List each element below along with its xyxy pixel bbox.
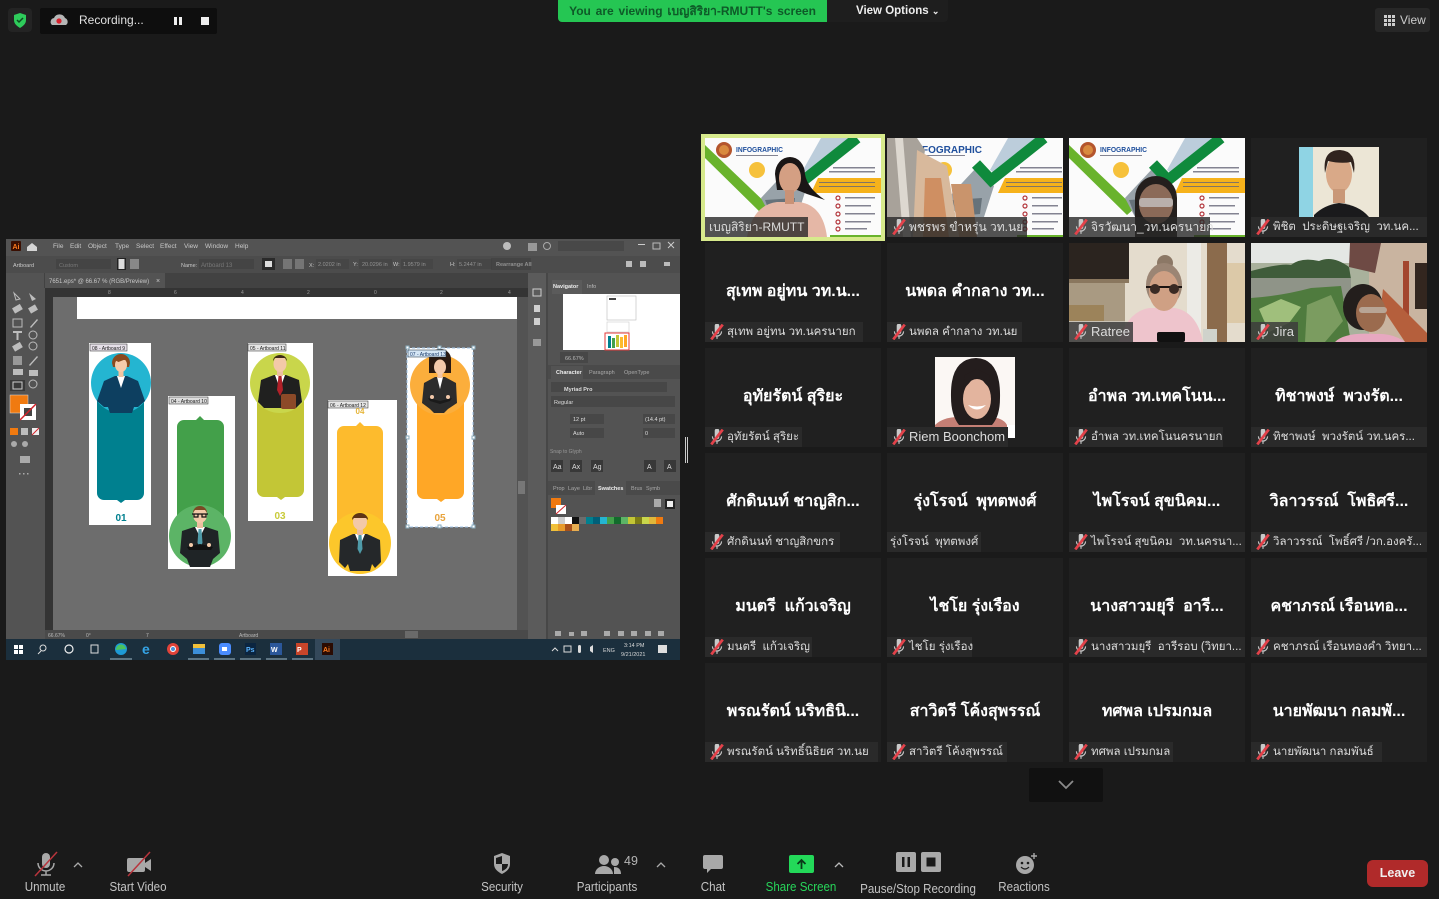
large name: นพดล คำกลาง วท... xyxy=(905,283,1045,300)
Illustrator window chrome: 2.0202 in xyxy=(318,262,341,268)
banner: viewing screen xyxy=(558,0,827,22)
canvas: 6 xyxy=(174,290,177,296)
tile: พรณรัตน์ xyxy=(705,663,881,762)
Windows taskbar: W xyxy=(271,647,278,654)
banner: viewing screen: You are viewing เบญสิริยา-RMUTT's screen xyxy=(569,4,816,18)
name tag xyxy=(1069,742,1173,762)
artboard 01: teal card: 01 xyxy=(115,513,127,524)
icon: share screen xyxy=(789,855,814,873)
tile: ไพโรจน์ xyxy=(1069,453,1245,552)
tile: พชรพร: INFOGRAPHIC xyxy=(912,145,982,156)
right dock panels: Laye xyxy=(568,486,580,492)
canvas xyxy=(45,290,528,639)
right dock panels: (14.4 pt) xyxy=(645,417,666,423)
view options dropdown: View Options ⌄ xyxy=(856,5,939,17)
artboard 05: orange card selected: 05 xyxy=(434,513,446,524)
tile: จิรวัฒนา: INFOGRAPHIC xyxy=(1100,145,1148,154)
tools panel xyxy=(6,273,44,639)
artboard 04: yellow card: 04 xyxy=(356,407,365,416)
artboard 01: teal card xyxy=(89,343,151,525)
large name: ไพโรจน์ สุขนิคม... xyxy=(1094,493,1220,510)
right dock panels: Symb xyxy=(646,486,660,492)
name tag: ทศพล เปรมกมล xyxy=(1091,746,1170,758)
large name: อุทัยรัตน์ สุริยะ xyxy=(743,388,843,405)
Illustrator window chrome: Help xyxy=(235,243,249,250)
tile: สาวิตรี xyxy=(887,663,1063,762)
Illustrator window chrome: File xyxy=(53,243,64,250)
canvas: 4 xyxy=(508,290,511,296)
large name: ศักดินนท์ ชาญสิก... xyxy=(726,493,860,510)
tile: presenter: INFOGRAPHIC xyxy=(736,145,784,154)
canvas: 2 xyxy=(307,290,310,296)
name tag: ศักดินนท์ ชาญสิกขกร xyxy=(727,536,834,548)
Illustrator window chrome: Select xyxy=(136,243,154,250)
participant count: 49 xyxy=(624,854,638,868)
artboard 02: green card xyxy=(168,396,235,569)
artboard 03: olive card: 03 xyxy=(274,511,286,522)
name tag: ไชโย รุ่งเรือง xyxy=(909,641,973,653)
right dock panels: Libr xyxy=(583,486,592,492)
name tag: พรณรัตน์ นริทธิ์นิธิยศ วท.นย xyxy=(727,746,869,758)
name tag xyxy=(1251,322,1298,342)
name tag xyxy=(887,217,1027,237)
tile: ศักดินนท์ xyxy=(705,453,881,552)
artboard 01: teal card: 08 - Artboard 9 xyxy=(92,346,125,352)
Illustrator window chrome: Artboard xyxy=(13,263,34,269)
tile: นพดล xyxy=(887,243,1063,342)
tile: จิรวัฒนา xyxy=(1069,138,1245,237)
tile: ไชโย xyxy=(887,558,1063,657)
split handle xyxy=(685,437,686,463)
tile: พชรพร xyxy=(887,138,1063,237)
Illustrator window chrome: Edit xyxy=(70,243,81,250)
canvas: Artboard xyxy=(239,633,258,639)
tile: คชาภรณ์ xyxy=(1251,558,1427,657)
right dock panels xyxy=(528,273,680,639)
leave button xyxy=(1367,860,1428,887)
Windows taskbar: e xyxy=(142,641,150,657)
large name: วิลาวรรณ์ โพธิศรี... xyxy=(1270,493,1408,510)
name tag xyxy=(1251,532,1427,552)
name tag: ทิชาพงษ์ พวงรัตน์ วท.นคร... xyxy=(1273,431,1415,443)
Illustrator window chrome: Effect xyxy=(160,243,177,250)
Illustrator window chrome: 1.9579 in xyxy=(403,262,426,268)
icon: security shield xyxy=(494,853,510,874)
large name: นายพัฒนา กลมพั... xyxy=(1273,703,1405,720)
Illustrator window chrome: Artboard 13 xyxy=(201,263,233,269)
name tag: เบญสิริยา-RMUTT xyxy=(709,220,804,234)
recording status bar: Recording... xyxy=(79,13,144,27)
icon: video off xyxy=(127,852,151,876)
tile: สุเทพ xyxy=(705,243,881,342)
tile: Riem xyxy=(887,348,1063,447)
icon: participants chevron xyxy=(656,862,666,868)
name tag: มนตรี แก้วเจริญ xyxy=(727,641,810,653)
name tag: นางสาวมยุรี อารีรอบ (วิทยา... xyxy=(1091,641,1242,653)
right dock panels: Snap to Glyph xyxy=(550,449,582,455)
name tag: นายพัฒนา กลมพันธ์ xyxy=(1273,746,1374,758)
right dock panels: Prop xyxy=(553,486,565,492)
tile: อุทัยรัตน์ xyxy=(705,348,881,447)
label: unmute: Unmute xyxy=(25,879,65,894)
name tag xyxy=(1069,427,1223,447)
name tag: Riem Boonchom xyxy=(909,429,1005,444)
tile: อำพล xyxy=(1069,348,1245,447)
name tag: พิชิต ประดิษฐเจริญ วท.นค... xyxy=(1273,221,1419,233)
canvas: 4 xyxy=(241,290,244,296)
tile: มนตรี xyxy=(705,558,881,657)
name tag xyxy=(1251,637,1427,657)
right dock panels: 12 pt xyxy=(573,417,586,423)
Windows taskbar: P xyxy=(297,647,302,654)
name tag xyxy=(705,532,840,552)
large name: อำพล วท.เทคโนน... xyxy=(1088,388,1226,405)
canvas: 0° xyxy=(86,633,91,639)
name tag xyxy=(705,427,802,447)
Windows taskbar: Ps xyxy=(246,647,255,654)
name tag xyxy=(887,637,972,657)
name tag xyxy=(1069,637,1245,657)
Illustrator window chrome: X: xyxy=(309,263,315,269)
name tag xyxy=(705,322,863,342)
right dock panels: Paragraph xyxy=(589,370,615,376)
label: pause stop recording: Pause/Stop Recording xyxy=(860,881,976,896)
tile: Ratree xyxy=(1069,243,1245,342)
large name: รุ่งโรจน์ พุทตพงศ์ xyxy=(914,493,1036,510)
right dock panels: 0 xyxy=(645,431,648,437)
Illustrator window chrome: Type xyxy=(115,243,129,250)
Illustrator window chrome: Name: xyxy=(181,263,198,269)
icon: pause recording xyxy=(896,852,916,872)
canvas: 8 xyxy=(108,290,111,296)
tile: นางสาวมยุรี xyxy=(1069,558,1245,657)
name tag: Ratree xyxy=(1091,324,1130,339)
Illustrator window chrome: View xyxy=(184,243,198,250)
artboard 03: olive card xyxy=(248,343,313,522)
right dock panels: Ag xyxy=(593,464,602,471)
name tag xyxy=(1069,532,1245,552)
tile: presenter xyxy=(705,138,881,237)
label: share screen: Share Screen xyxy=(766,879,836,894)
label: security: Security xyxy=(481,879,523,894)
name tag xyxy=(705,217,808,237)
right dock panels: Navigator xyxy=(553,284,579,290)
icon: unmute chevron xyxy=(74,862,82,868)
right dock panels: Swatches xyxy=(598,486,623,492)
label: chat: Chat xyxy=(701,879,725,894)
large name: ทศพล เปรมกมล xyxy=(1102,703,1212,720)
Illustrator window chrome: 20.0296 in xyxy=(362,262,388,268)
icon: share chevron xyxy=(834,862,844,868)
icon: muted microphone xyxy=(34,852,58,876)
label: reactions: Reactions xyxy=(998,879,1050,894)
name tag xyxy=(887,742,1007,762)
label: participants: Participants xyxy=(577,879,637,894)
name tag: วิลาวรรณ์ โพธิ์ศรี /วก.องครั... xyxy=(1273,536,1422,548)
right dock panels: Info xyxy=(587,284,596,290)
name tag xyxy=(1069,217,1210,237)
name tag: นพดล คำกลาง วท.นย xyxy=(909,326,1017,338)
right dock panels: Auto xyxy=(573,431,584,437)
large name: ทิชาพงษ์ พวงรัต... xyxy=(1275,388,1403,405)
right dock panels: Myriad Pro xyxy=(564,387,593,393)
right dock panels: Brus xyxy=(631,486,643,492)
name tag: อำพล วท.เทคโนนครนายก xyxy=(1091,431,1222,443)
canvas: 2 xyxy=(440,290,443,296)
tile: วิลาวรรณ์ xyxy=(1251,453,1427,552)
large name: สุเทพ อยู่ทน วท.น... xyxy=(726,283,860,300)
security shield badge xyxy=(8,8,32,32)
large name: พรณรัตน์ นริทธินิ... xyxy=(727,703,859,720)
Illustrator window chrome: Search Adobe Help xyxy=(571,244,618,250)
name tag xyxy=(887,427,1008,447)
name tag: ไพโรจน์ สุขนิคม วท.นครนา... xyxy=(1091,536,1242,548)
canvas: 66.67% xyxy=(48,633,66,639)
Windows taskbar: 9/21/2021 xyxy=(621,652,645,658)
canvas: 0 xyxy=(374,290,377,296)
icon: reactions xyxy=(1016,853,1037,874)
icon: participants xyxy=(595,855,621,874)
Windows taskbar: Ai xyxy=(323,647,330,654)
tile: นายพัฒนา xyxy=(1251,663,1427,762)
toolbar xyxy=(34,852,1428,887)
name tag xyxy=(1251,217,1427,237)
large name: คชาภรณ์ เรือนทอ... xyxy=(1270,598,1408,615)
view options dropdown xyxy=(827,0,948,22)
label: start video: Start Video xyxy=(109,879,167,894)
Illustrator window chrome: Object xyxy=(88,243,107,250)
Illustrator window chrome: Y: xyxy=(353,262,358,268)
right dock panels: A xyxy=(667,464,672,471)
name tag xyxy=(887,322,1022,342)
Illustrator window chrome xyxy=(6,239,680,660)
Illustrator window chrome: Ai xyxy=(12,244,20,251)
recording status bar xyxy=(40,8,217,34)
tile: Jira xyxy=(1251,243,1427,342)
name tag xyxy=(1069,322,1133,342)
Illustrator window chrome: 7651.eps* @ 66.67 % (RGB/Preview) xyxy=(49,279,149,285)
right dock panels: Regular xyxy=(554,400,573,406)
large name: มนตรี แก้วเจริญ xyxy=(735,598,851,615)
name tag: Jira xyxy=(1273,324,1294,339)
name tag: คชาภรณ์ เรือนทองคำ วิทยา... xyxy=(1273,641,1422,653)
artboard 05: orange card selected xyxy=(406,346,475,528)
name tag: สุเทพ อยู่ทน วท.นครนายก xyxy=(727,326,856,338)
Windows taskbar: ENG xyxy=(603,648,615,654)
Windows taskbar: 3:14 PM xyxy=(624,643,645,649)
tile: ทิชาพงษ์ xyxy=(1251,348,1427,447)
artboard 02: green card: 04 - Artboard 10 xyxy=(171,399,207,405)
name tag xyxy=(705,742,878,762)
name tag: อุทัยรัตน์ สุริยะ xyxy=(727,431,799,443)
Windows taskbar xyxy=(6,639,680,660)
Illustrator window chrome: × xyxy=(156,278,160,285)
right dock panels: Character xyxy=(556,370,583,376)
right dock panels: OpenType xyxy=(624,370,649,376)
leave button: Leave xyxy=(1380,866,1415,880)
Illustrator window chrome: Rearrange All xyxy=(496,262,532,268)
Illustrator window chrome: Window xyxy=(205,243,228,250)
tile: รุ่งโรจน์ xyxy=(887,453,1063,552)
right dock panels: Ax xyxy=(572,464,581,471)
name tag: สาวิตรี โค้งสุพรรณ์ xyxy=(909,746,1003,758)
large name: นางสาวมยุรี อารี... xyxy=(1090,598,1224,615)
canvas: 7 xyxy=(146,633,149,639)
view layout button: View xyxy=(1400,13,1426,27)
panel: shared Illustrator screen xyxy=(6,239,680,660)
artboard 03: olive card: 05 - Artboard 11 xyxy=(250,346,286,352)
large name: สาวิตรี โค้งสุพรรณ์ xyxy=(910,703,1040,720)
name tag: พชรพร ขำหรุ่น วท.นย xyxy=(909,220,1023,234)
name tag xyxy=(887,532,981,552)
Illustrator window chrome: Custom xyxy=(59,263,78,269)
active speaker highlight xyxy=(701,134,885,241)
Illustrator window chrome: H: xyxy=(450,262,456,268)
artboard 04: yellow card: 06 - Artboard 12 xyxy=(330,403,366,409)
artboard 04: yellow card xyxy=(328,400,397,576)
name tag xyxy=(1251,742,1382,762)
name tag xyxy=(1251,427,1427,447)
name tag: จิรวัฒนา_วท.นครนายก xyxy=(1091,220,1214,234)
right dock panels: 66.67% xyxy=(565,356,584,362)
artboard 05: orange card selected: 07 - Artboard 13 xyxy=(410,352,446,358)
tile: พิชิต xyxy=(1251,138,1427,237)
name tag: รุ่งโรจน์ พุทตพงศ์ xyxy=(890,536,978,548)
Illustrator window chrome: 5.2447 in xyxy=(459,262,482,268)
icon: stop recording xyxy=(921,852,941,872)
view layout button xyxy=(1375,8,1430,32)
right dock panels: Aa xyxy=(553,464,562,471)
tile: ทศพล xyxy=(1069,663,1245,762)
large name: ไชโย รุ่งเรือง xyxy=(930,598,1020,615)
name tag xyxy=(705,637,812,657)
right dock panels: A xyxy=(647,464,652,471)
icon: chat xyxy=(703,855,723,873)
next page arrow xyxy=(1029,768,1103,802)
Illustrator window chrome: W: xyxy=(393,262,400,268)
